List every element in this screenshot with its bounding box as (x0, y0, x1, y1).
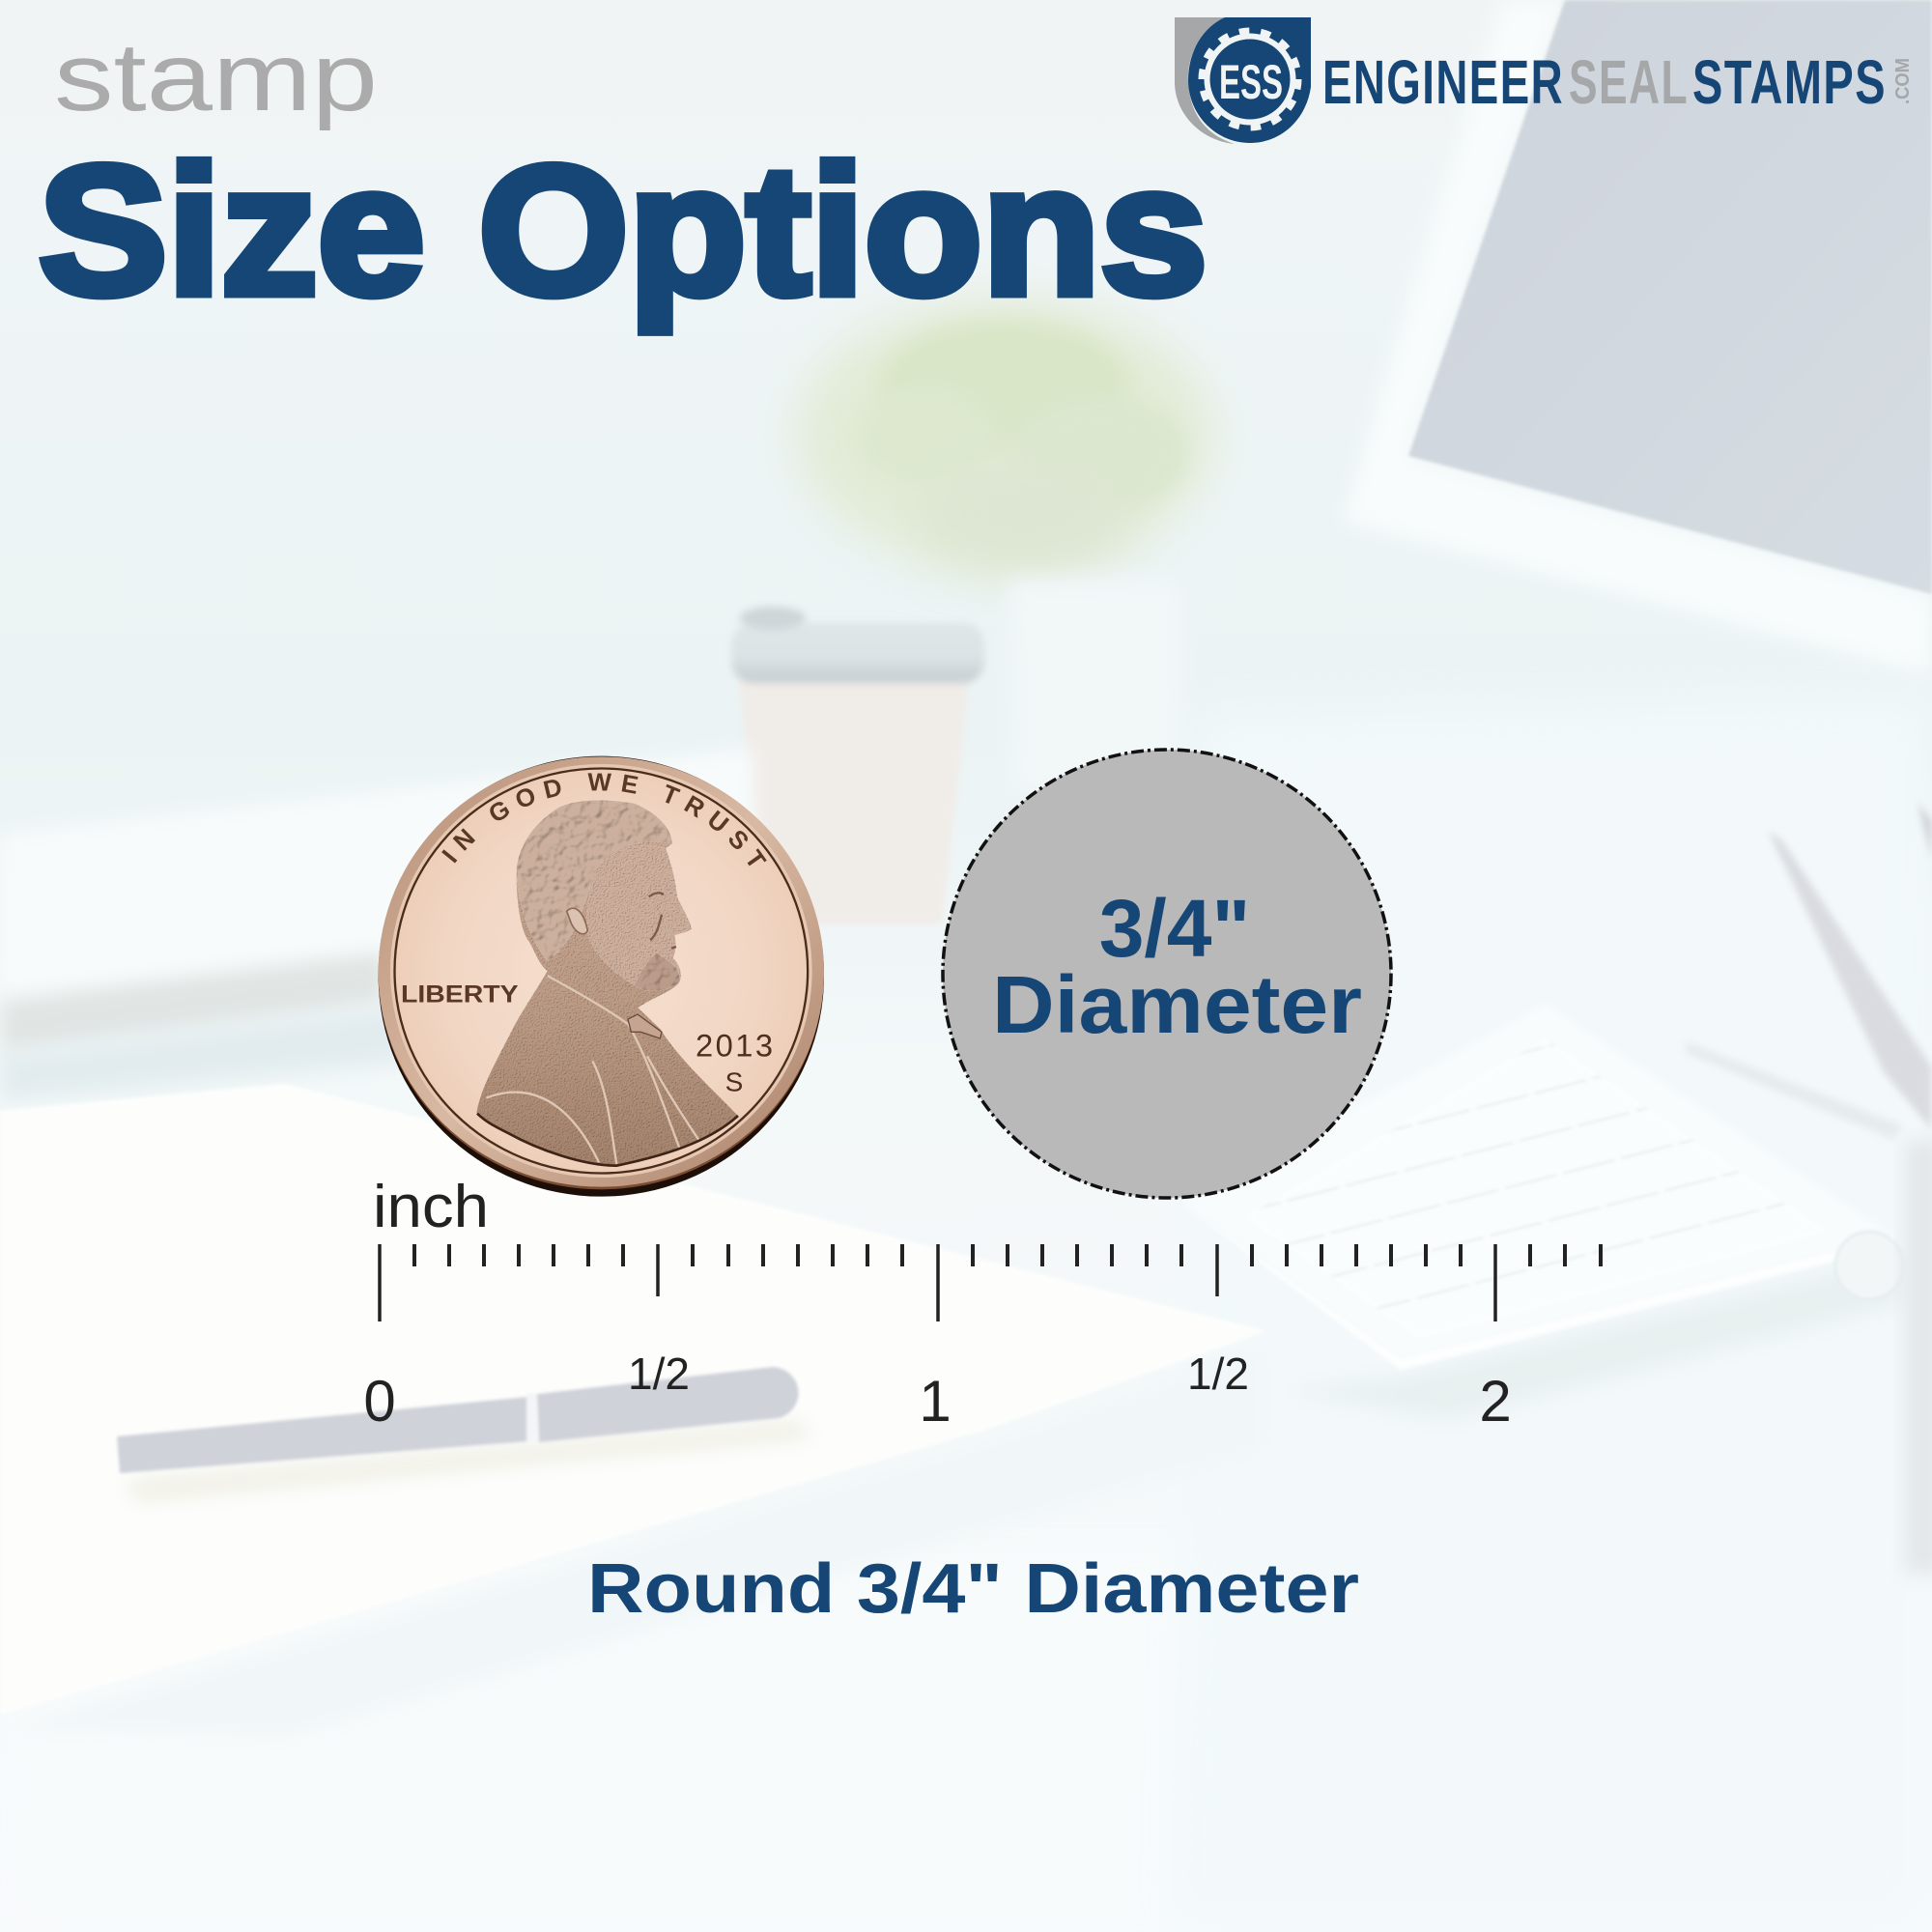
beard (635, 953, 679, 991)
logo icon: gear shield (1175, 17, 1311, 144)
penny coin (379, 755, 824, 1197)
coin year: 2013 (696, 1027, 773, 1063)
logo wordmark: SEAL (1569, 47, 1689, 117)
circle label fraction: 3/4" (1099, 883, 1250, 974)
plant (797, 299, 1212, 570)
coin mint mark: S (725, 1066, 743, 1096)
caption: Round 3/4" Diameter: Round 3/4" Diameter (587, 1550, 1359, 1628)
laptop screen (1408, 0, 1932, 594)
eye and mouth (649, 893, 676, 949)
pencils on right (1686, 802, 1932, 1140)
bust bottom shadow (477, 1114, 738, 1166)
logo wordmark: ENGINEER (1322, 47, 1564, 117)
coin inscription: IN GOD WE TRUST (441, 773, 767, 866)
right holder (1905, 1140, 1932, 1575)
coin LIBERTY: LIBERTY (401, 980, 519, 1008)
ruler numbers: 1/2 (1187, 1349, 1249, 1399)
book on left (0, 749, 753, 1101)
logo: Engineer Seal Stamps (1175, 17, 1914, 144)
coffee cup (731, 607, 984, 924)
paper sheet (0, 1084, 1265, 1715)
ruler numbers: 1 (919, 1369, 952, 1434)
laptop bezel (1343, 0, 1932, 676)
ruler numbers: 2 (1479, 1369, 1512, 1434)
ear (567, 908, 587, 934)
title: Size Options: Size Options (39, 128, 1208, 333)
keyboard (1183, 1005, 1903, 1420)
stamp size circle (943, 750, 1391, 1198)
Lincoln bust (476, 800, 738, 1166)
ruler numbers: 0 (363, 1369, 396, 1434)
logo wordmark (1322, 47, 1887, 117)
ruler numbers (363, 1349, 1512, 1434)
logo icon: gear shield: ESS (1219, 55, 1283, 109)
hair (517, 800, 672, 961)
coat lines (486, 976, 698, 1164)
face (586, 845, 692, 991)
ruler (363, 1174, 1601, 1434)
logo .com: .COM (1892, 58, 1914, 104)
ruler numbers: 1/2 (628, 1349, 690, 1399)
circle label Diameter: Diameter (992, 959, 1362, 1050)
small heading: stamp: stamp (54, 23, 378, 131)
ruler ticks (380, 1244, 1601, 1321)
plant pot (1009, 580, 1183, 792)
collar bow tie (628, 1014, 662, 1038)
desk surface (1159, 696, 1932, 1932)
paper shadow below (0, 1348, 1265, 1739)
ruler unit label: inch (373, 1174, 489, 1240)
pen on desk (117, 1367, 811, 1502)
